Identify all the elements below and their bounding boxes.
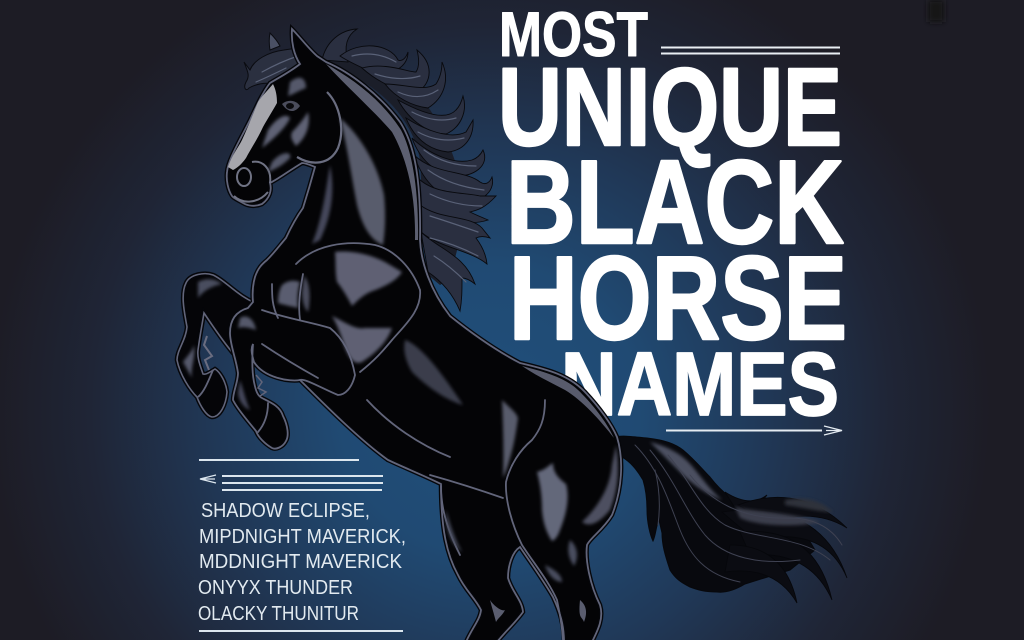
shoulder highlight xyxy=(335,251,402,306)
name 4: ONYYX THUNDER xyxy=(198,577,353,599)
title line: UNIQUE: UNIQUE xyxy=(498,46,842,169)
cheek highlights xyxy=(291,112,309,146)
tail locks xyxy=(722,492,847,603)
belly sheen xyxy=(404,340,463,405)
near leg feathering xyxy=(256,375,266,396)
panel rule bottom xyxy=(199,630,403,632)
forelock xyxy=(244,48,305,90)
title line: HORSE: HORSE xyxy=(509,232,847,365)
dark smudge top right xyxy=(928,0,944,22)
far foreleg xyxy=(177,274,262,417)
muzzle and nostril xyxy=(234,162,270,202)
panel rule top xyxy=(199,459,359,461)
name 3: MDDNIGHT MAVERICK xyxy=(199,551,403,573)
horse xyxy=(177,29,847,640)
pastern sheen xyxy=(490,600,505,622)
near foreleg sheen xyxy=(238,316,256,330)
triple rule xyxy=(222,476,383,490)
mane strand highlights xyxy=(256,54,484,282)
chest muscle highlights xyxy=(278,281,300,308)
horse body xyxy=(227,29,621,640)
arrow left xyxy=(200,475,216,483)
title line: NAMES: NAMES xyxy=(561,335,839,435)
hock sheen xyxy=(568,540,577,566)
interior contour lines xyxy=(258,243,563,640)
title line: MOST: MOST xyxy=(499,0,648,70)
hip highlight xyxy=(537,463,568,541)
blaze xyxy=(228,84,277,170)
cheek ring xyxy=(297,92,341,163)
neck highlight xyxy=(340,118,385,245)
name 5: OLACKY THUNITUR xyxy=(198,603,359,625)
title line: BLACK: BLACK xyxy=(506,136,844,269)
mane locks xyxy=(322,29,496,311)
arrow under NAMES xyxy=(666,426,842,435)
neck front sheen xyxy=(312,165,332,244)
name 1: SHADOW ECLIPSE, xyxy=(201,500,370,522)
rump edge highlight xyxy=(582,445,618,524)
crest highlight xyxy=(326,64,418,240)
double rule beside MOST xyxy=(661,48,840,54)
far hoof line xyxy=(198,370,213,397)
title xyxy=(498,0,847,435)
eye xyxy=(282,101,300,111)
tail xyxy=(612,436,847,603)
flank strip xyxy=(502,400,518,478)
rump top highlight xyxy=(522,366,614,438)
mane xyxy=(244,29,496,311)
name 2: MIPDNIGHT MAVERICK, xyxy=(199,526,406,548)
far ear xyxy=(269,33,280,50)
forearm highlight xyxy=(332,316,392,363)
names list xyxy=(198,500,406,625)
names panel xyxy=(198,460,406,631)
